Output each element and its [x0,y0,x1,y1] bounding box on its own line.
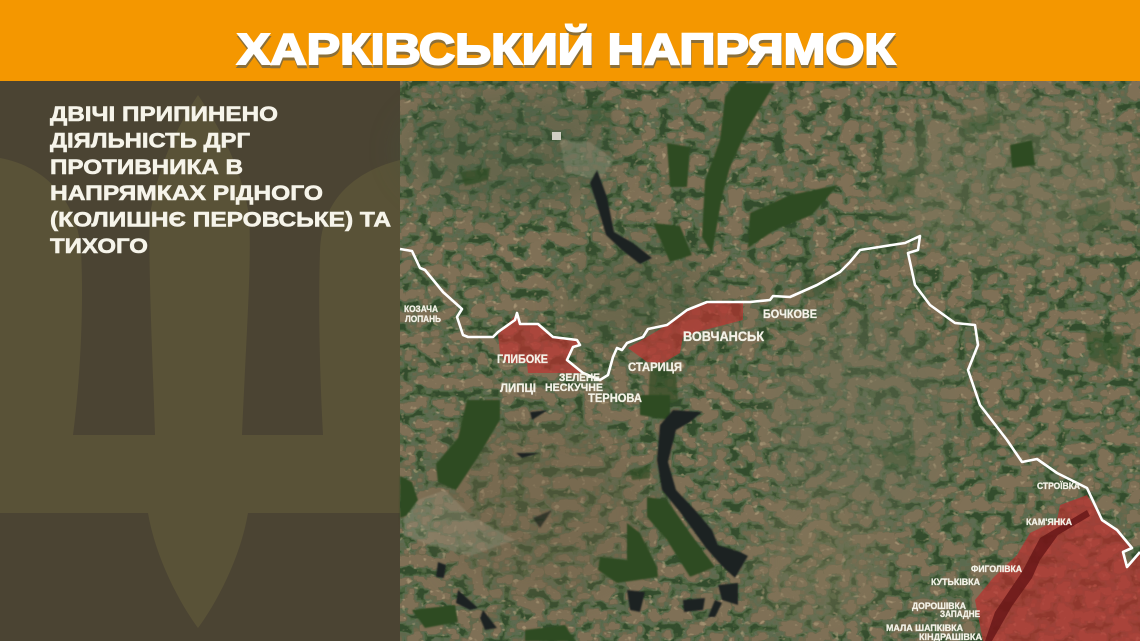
map: settlement labels: СТАРИЦЯ [628,360,682,374]
text block: situation summary [50,103,391,258]
map: settlement labels: СТРОЇВКА [1037,481,1080,492]
map: settlement labels: ДОРОШІВКА [912,601,966,612]
map: rivers and reservoirs [436,170,748,630]
map: settlement labels: ЗЕЛЕНЕ [559,372,600,384]
panel: left information panel [0,81,400,641]
map: settlement labels: КУТЬКІВКА [931,577,980,588]
text block: situation summary: ДВІЧІ ПРИПИНЕНО [50,103,278,126]
map: cities [404,132,614,556]
text block: situation summary: ПРОТИВНИКА В [50,156,243,179]
map: red occupied zone Vovchansk [628,303,743,363]
icon: trident watermark [0,95,400,628]
header: orange title bar [0,0,1140,81]
map: settlement labels: ТЕРНОВА [588,391,642,405]
map: settlement labels: НЕСКУЧНЕ [545,382,603,394]
text block: situation summary: ДІЯЛЬНІСТЬ ДРГ [50,130,250,152]
map: settlement labels: ФИГОЛІВКА [971,564,1022,575]
map: front line [400,236,1140,567]
map: settlement labels [404,304,1080,641]
map: satellite base [400,81,1140,641]
map: settlement labels: КАМ'ЯНКА [1026,517,1072,528]
map: settlement labels: КОЗАЧА [404,304,438,314]
map: settlement labels: МАЛА ШАПКІВКА [886,623,963,634]
title: ХАРКІВСЬКИЙ НАПРЯМОК [238,26,896,77]
map: settlement labels: ГЛИБОКЕ [497,352,548,366]
map: red occupied zone Hlyboke [498,313,583,373]
text block: situation summary: (КОЛИШНЄ ПЕРОВСЬКЕ) ТА [50,208,391,232]
map: settlement labels: БОЧКОВЕ [763,307,817,321]
map: forests [400,83,1125,641]
title: ХАРКІВСЬКИЙ НАПРЯМОК [237,23,895,74]
map: settlement labels: ЛИПЦІ [500,381,536,395]
map: settlement labels: ВОВЧАНСЬК [683,328,764,344]
map: red occupied zone south-east [975,495,1140,641]
map: settlement labels: ЛОПАНЬ [405,314,441,324]
text block: situation summary: НАПРЯМКАХ РІДНОГО [50,182,323,205]
text block: situation summary: ТИХОГО [50,235,148,258]
map: settlement labels: ЗАПАДНЕ [940,609,980,620]
